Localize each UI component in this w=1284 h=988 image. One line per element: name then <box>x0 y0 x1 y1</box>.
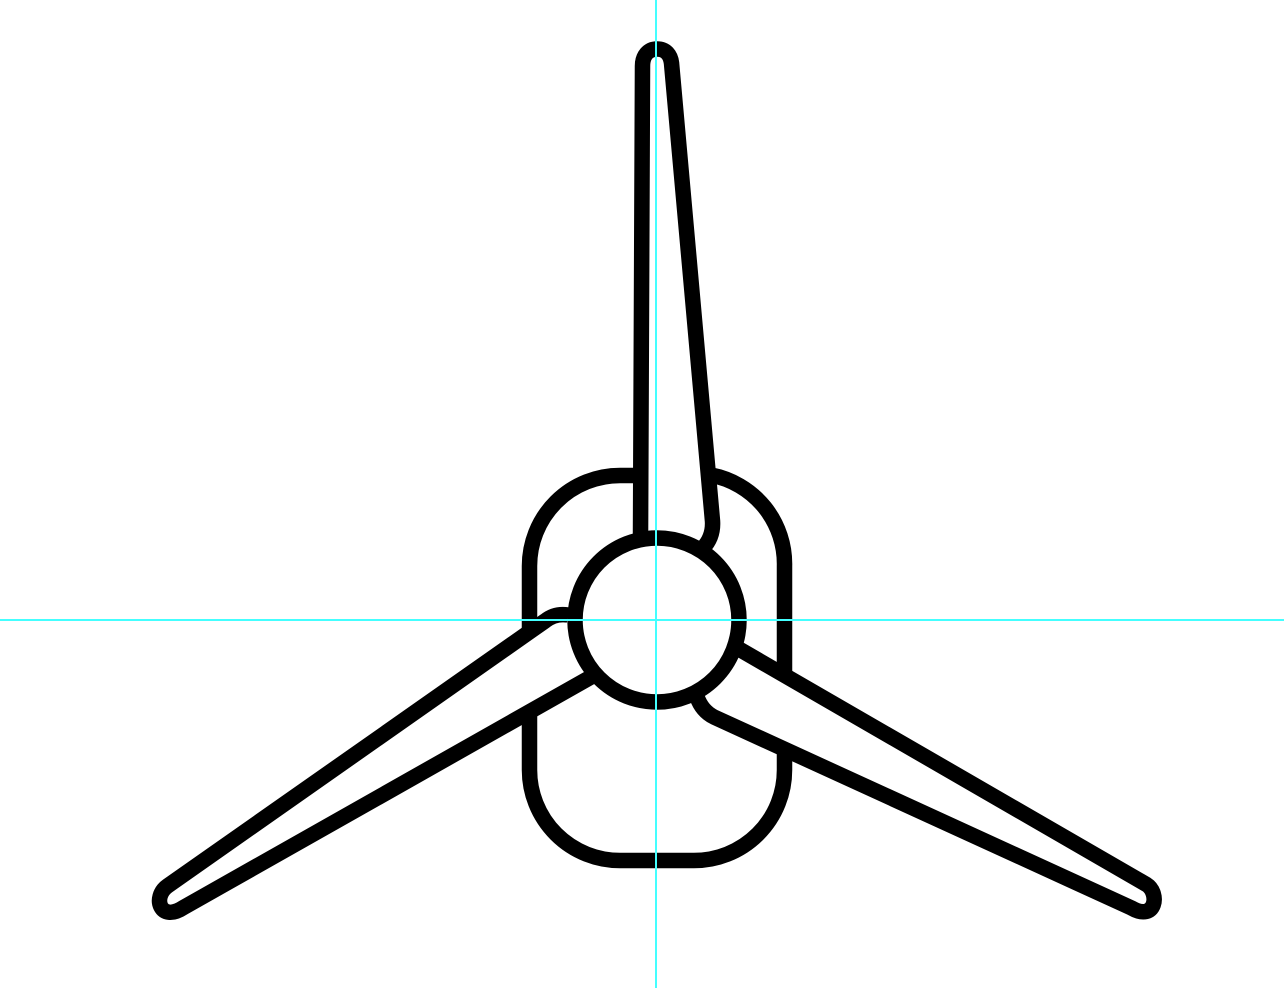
top blade <box>640 49 713 548</box>
horizontal guide line <box>0 619 1284 621</box>
icon: wind turbine <box>160 49 1154 912</box>
left blade <box>160 615 591 912</box>
nacelle body outline <box>530 475 785 860</box>
vertical guide line <box>655 0 657 988</box>
right blade <box>697 649 1154 912</box>
hub circle <box>575 538 739 702</box>
